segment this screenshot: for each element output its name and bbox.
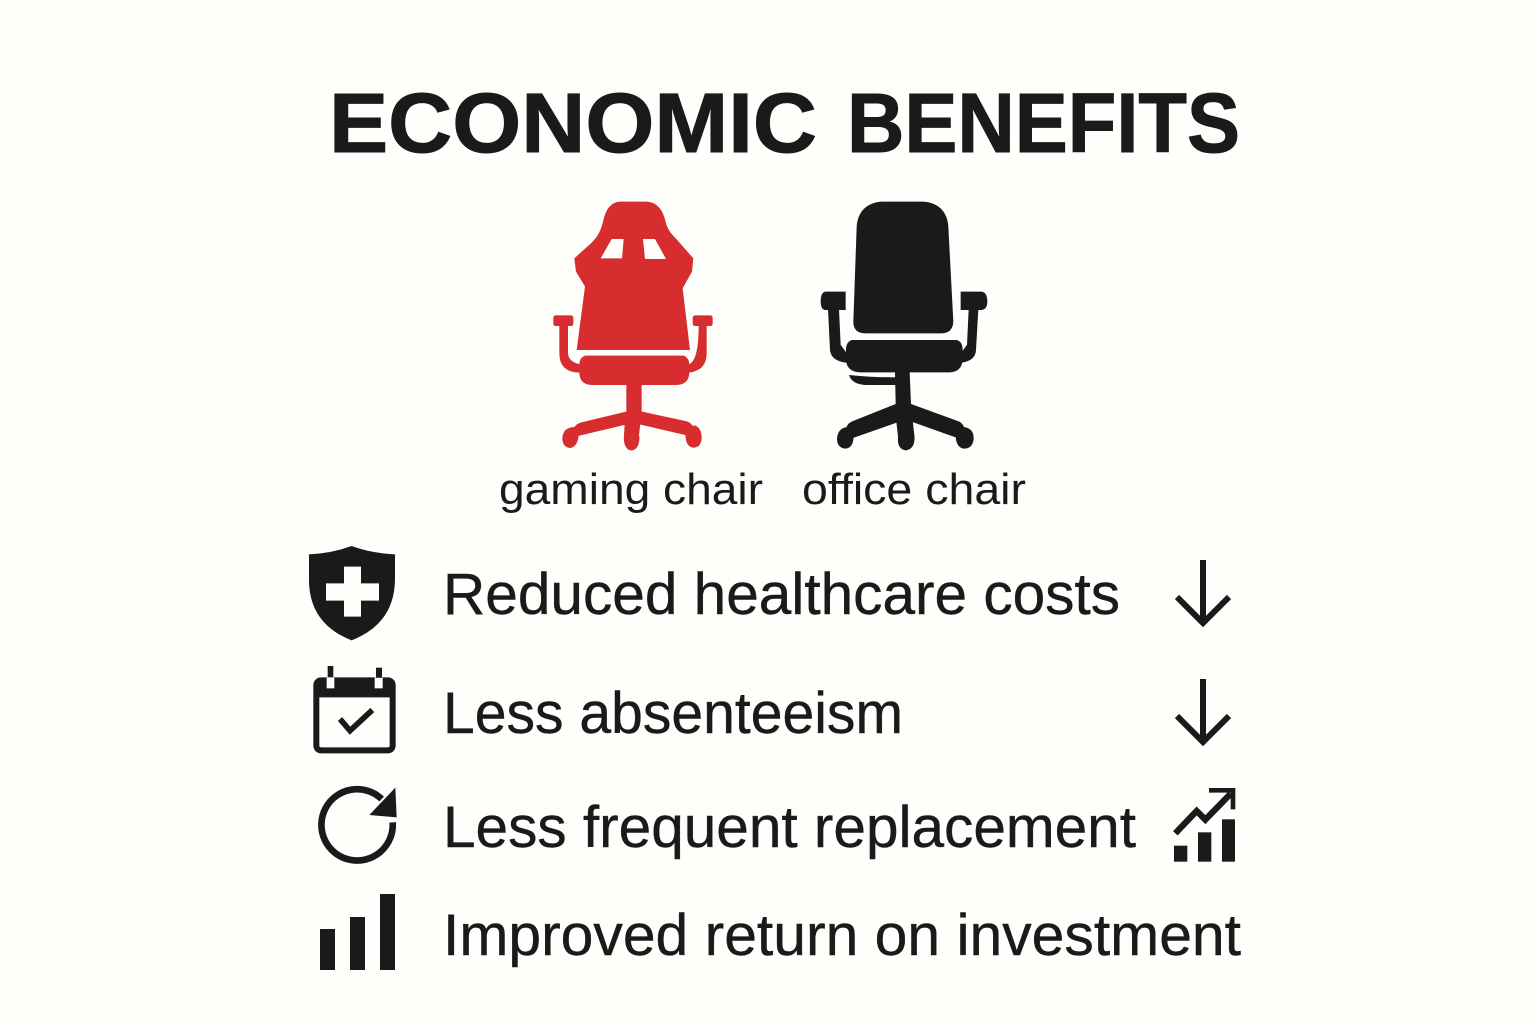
icon: gaming chair [554, 202, 712, 449]
label: gaming chair: gaming chair [499, 465, 763, 514]
icon: shield with cross [309, 546, 395, 640]
text: reduced healthcare costs: Reduced healthcare costs [443, 562, 1120, 627]
text: less frequent replacement: Less frequent replacement [443, 795, 1136, 860]
title: ECONOMIC [329, 76, 817, 170]
row: improved return on investment [320, 894, 1241, 970]
row: reduced healthcare costs [309, 546, 1229, 640]
icon: office chair [821, 202, 987, 449]
arrow: down [1177, 560, 1229, 623]
icon: replacement cycle arrow [321, 788, 397, 861]
title: BENEFITS [847, 76, 1240, 170]
text: improved return on investment: Improved return on investment [443, 903, 1241, 968]
row: less absenteeism [316, 666, 1229, 750]
icon: bar chart [320, 894, 395, 970]
title [329, 76, 1240, 170]
arrow: down [1177, 679, 1229, 742]
text: less absenteeism: Less absenteeism [443, 681, 903, 746]
label: office chair: office chair [802, 465, 1026, 514]
icon: rising chart [1174, 788, 1235, 862]
icon: calendar with check [316, 666, 393, 750]
row: less frequent replacement [321, 788, 1235, 862]
